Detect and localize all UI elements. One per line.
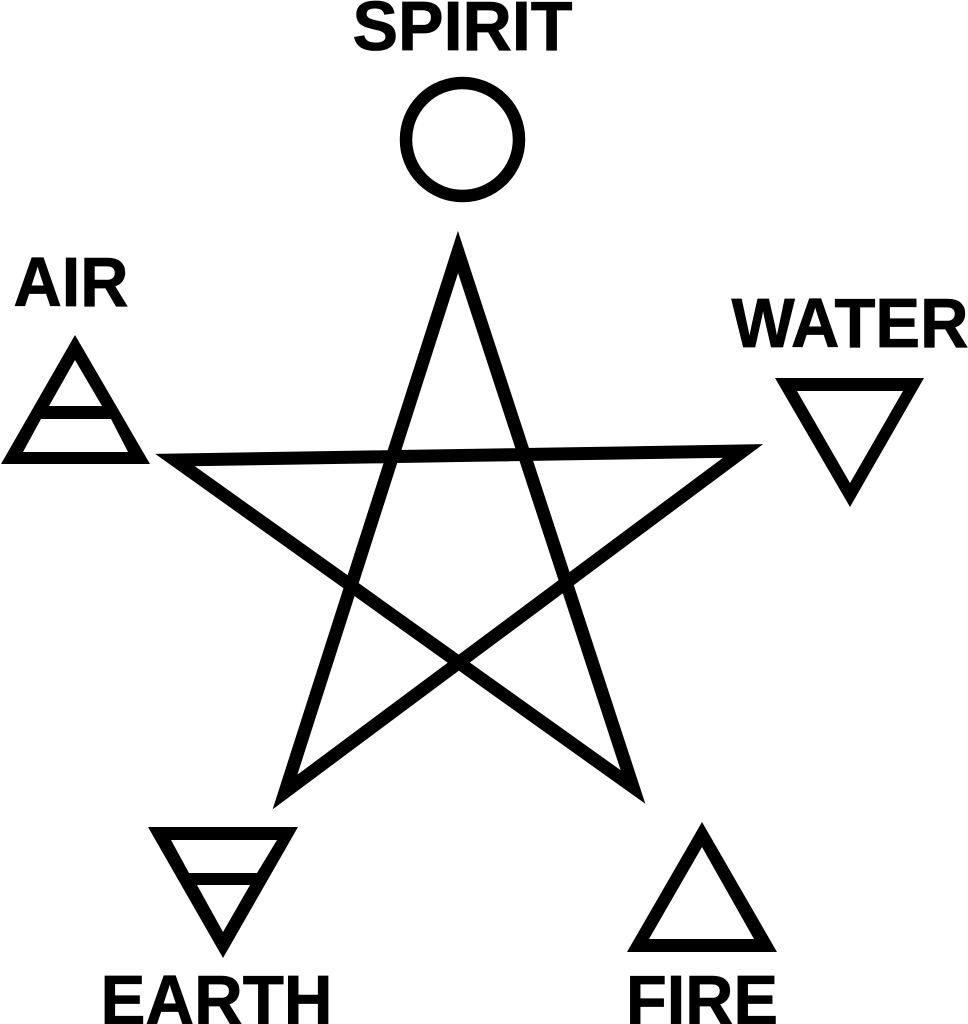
pentagram star: [175, 252, 743, 792]
icon: spirit circle: [406, 83, 519, 196]
icon: fire triangle: [627, 822, 777, 952]
icon: earth triangle: [148, 827, 298, 958]
icon: air triangle: [1, 335, 150, 464]
icon: water triangle: [775, 378, 924, 507]
label: air: AIR: [14, 243, 128, 321]
